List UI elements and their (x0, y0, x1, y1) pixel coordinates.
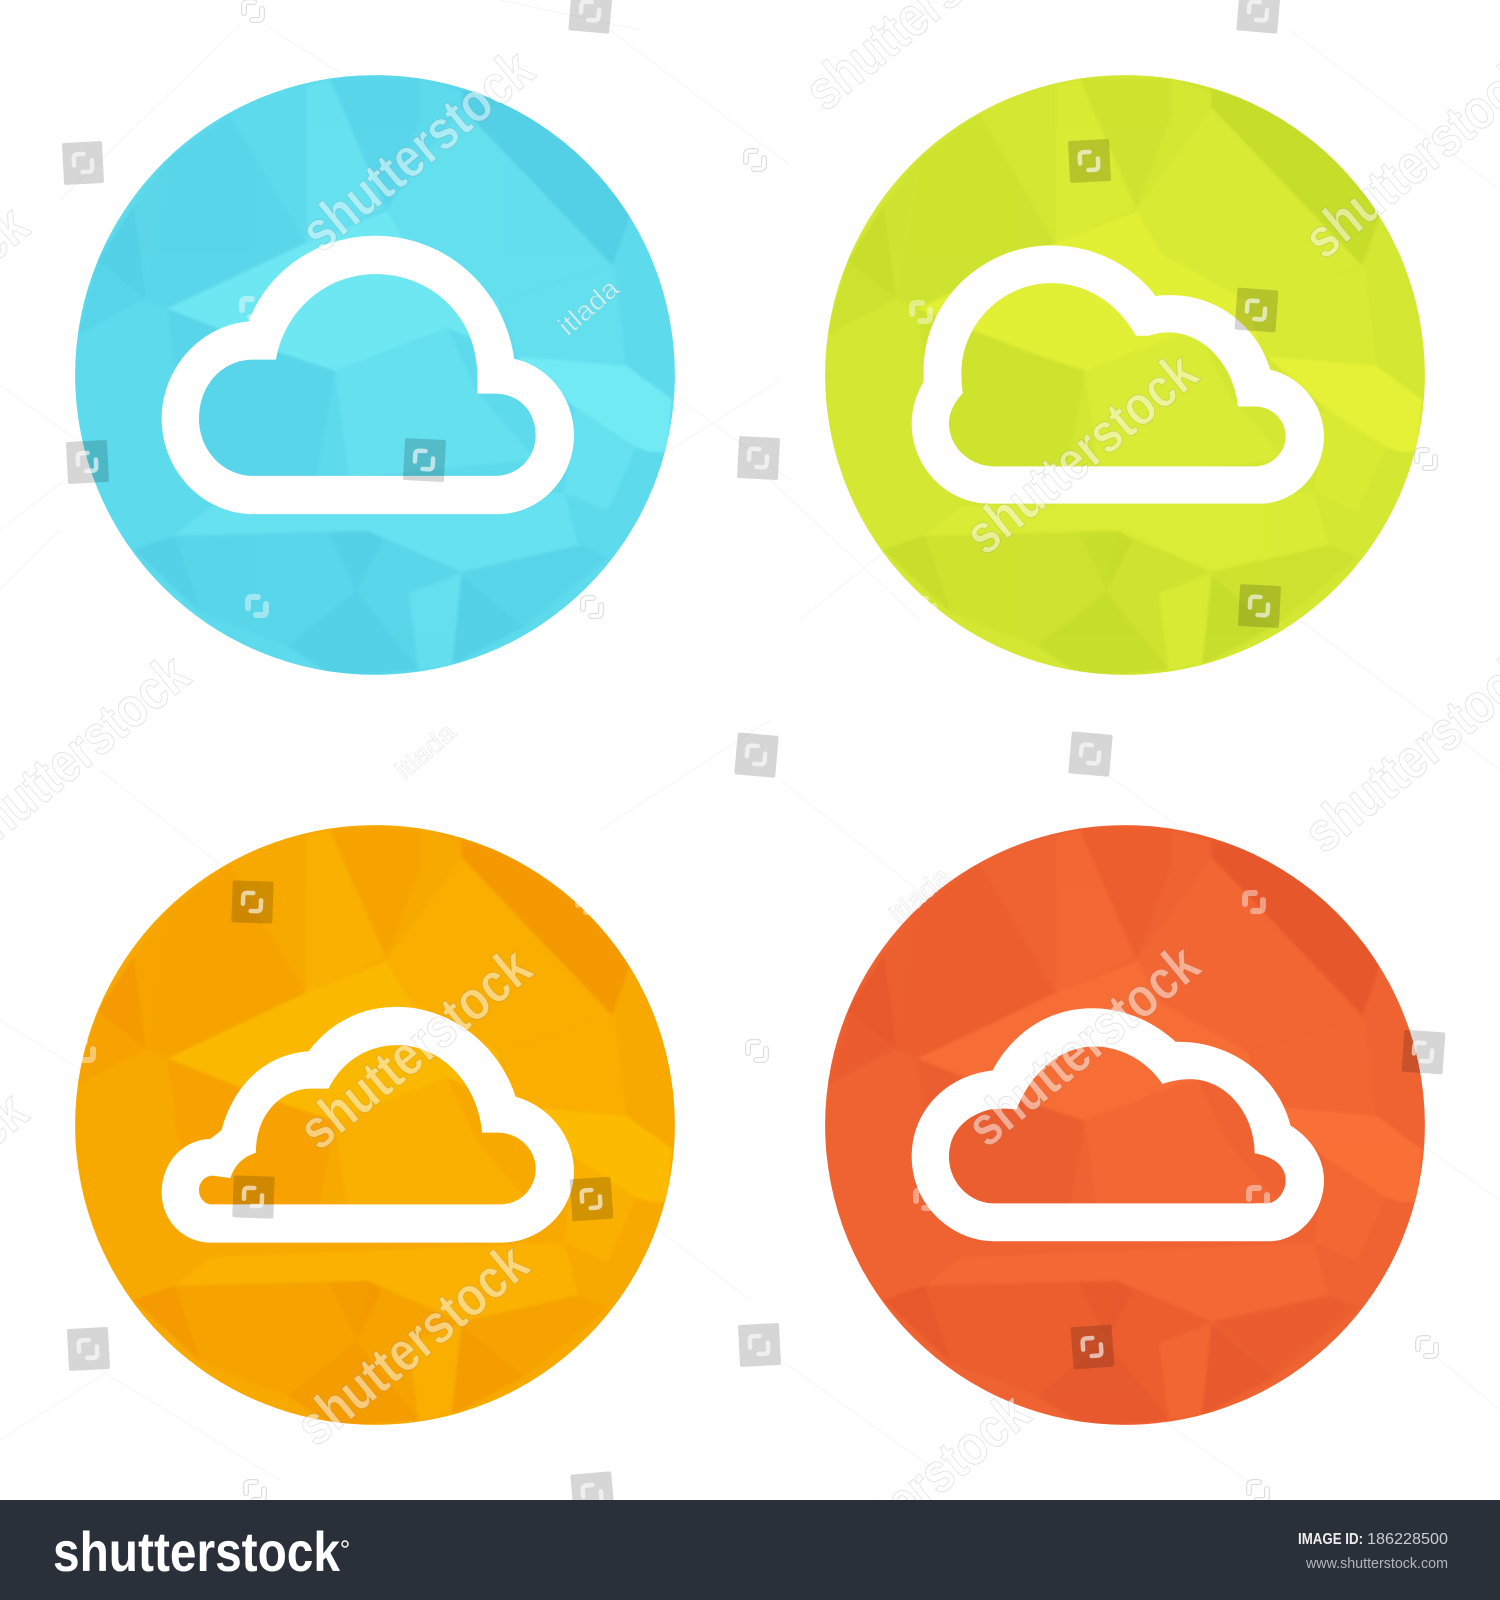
watermark text layer: itlada (389, 716, 463, 786)
blue faceted circle (75, 75, 675, 675)
panel: orange cloud badge (75, 825, 675, 1425)
watermark text layer: itlada (883, 860, 957, 930)
image id line: IMAGE ID: (1298, 1531, 1363, 1548)
watermark text layer: shutterstock (289, 36, 545, 263)
icon: green panel cloud (912, 245, 1324, 504)
watermark text layer: itlada (552, 272, 626, 342)
footer bar (0, 1500, 1500, 1600)
red faceted circle (825, 825, 1425, 1425)
panel: green cloud badge (825, 75, 1425, 675)
website url: www.shutterstock.com (1305, 1555, 1448, 1572)
watermark text layer: shutterstock (785, 1379, 1041, 1600)
watermark text layer: shutterstock (287, 934, 543, 1161)
icon: orange panel cloud (162, 1007, 574, 1243)
footer logo wordmark: shutterstock (53, 1520, 341, 1583)
panel: red cloud badge (825, 825, 1425, 1425)
watermark text layer: shutterstock (284, 1230, 540, 1457)
orange faceted circle (75, 825, 675, 1425)
icon: red panel cloud (912, 1008, 1324, 1241)
green faceted circle (825, 75, 1425, 675)
icon: blue panel cloud (162, 236, 574, 514)
watermark text layer: shutterstock (953, 339, 1209, 566)
watermark text layer: shutterstock (955, 931, 1211, 1158)
panel: blue cloud badge (75, 75, 675, 675)
image id line: 186228500 (1367, 1531, 1448, 1548)
